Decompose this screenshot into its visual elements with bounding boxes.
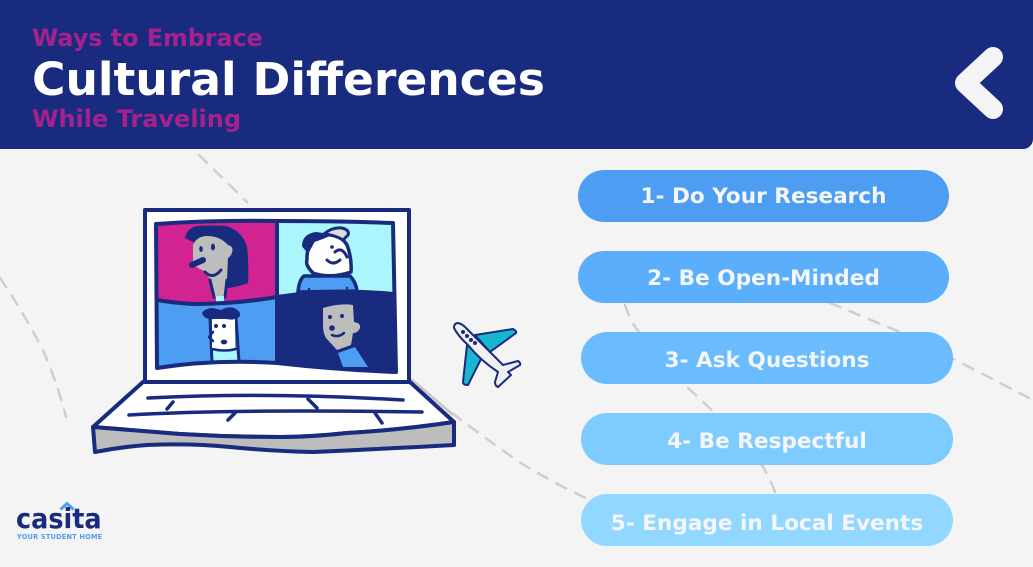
laptop screen frame bbox=[145, 210, 409, 382]
list item 5: 5- Engage in Local Events bbox=[611, 511, 923, 536]
logo tagline: YOUR STUDENT HOME bbox=[17, 533, 102, 541]
video grid outline bbox=[156, 221, 396, 372]
icon: back chevron bbox=[955, 47, 1003, 119]
header banner bbox=[0, 0, 1033, 149]
laptop base bbox=[93, 380, 454, 452]
subtitle: ways to embrace: Ways to Embrace bbox=[32, 24, 263, 52]
illustration: laptop with video call bbox=[91, 208, 456, 454]
list item 5 bbox=[581, 494, 953, 546]
list item 3: 3- Ask Questions bbox=[665, 348, 869, 373]
list item 2: 2- Be Open-Minded bbox=[647, 266, 880, 291]
video tile: woman on magenta bbox=[157, 221, 277, 303]
icon: airplane bbox=[453, 322, 522, 388]
logo wordmark: casita bbox=[16, 503, 102, 535]
title: Cultural Differences bbox=[32, 53, 545, 106]
video tile: man with cap on light cyan bbox=[279, 222, 393, 296]
list item 4: 4- Be Respectful bbox=[667, 429, 867, 454]
list item 1: 1- Do Your Research bbox=[640, 184, 886, 209]
subtitle: while traveling: While Traveling bbox=[32, 105, 241, 133]
list item 2 bbox=[578, 251, 949, 303]
logo: casita bbox=[16, 502, 102, 541]
video tile: man on navy bbox=[278, 292, 397, 372]
list item 1 bbox=[578, 170, 949, 222]
list item 4 bbox=[581, 413, 953, 465]
icon: logo roof bbox=[60, 502, 74, 511]
list item 3 bbox=[581, 332, 953, 384]
video tile: person on blue bbox=[158, 298, 277, 367]
